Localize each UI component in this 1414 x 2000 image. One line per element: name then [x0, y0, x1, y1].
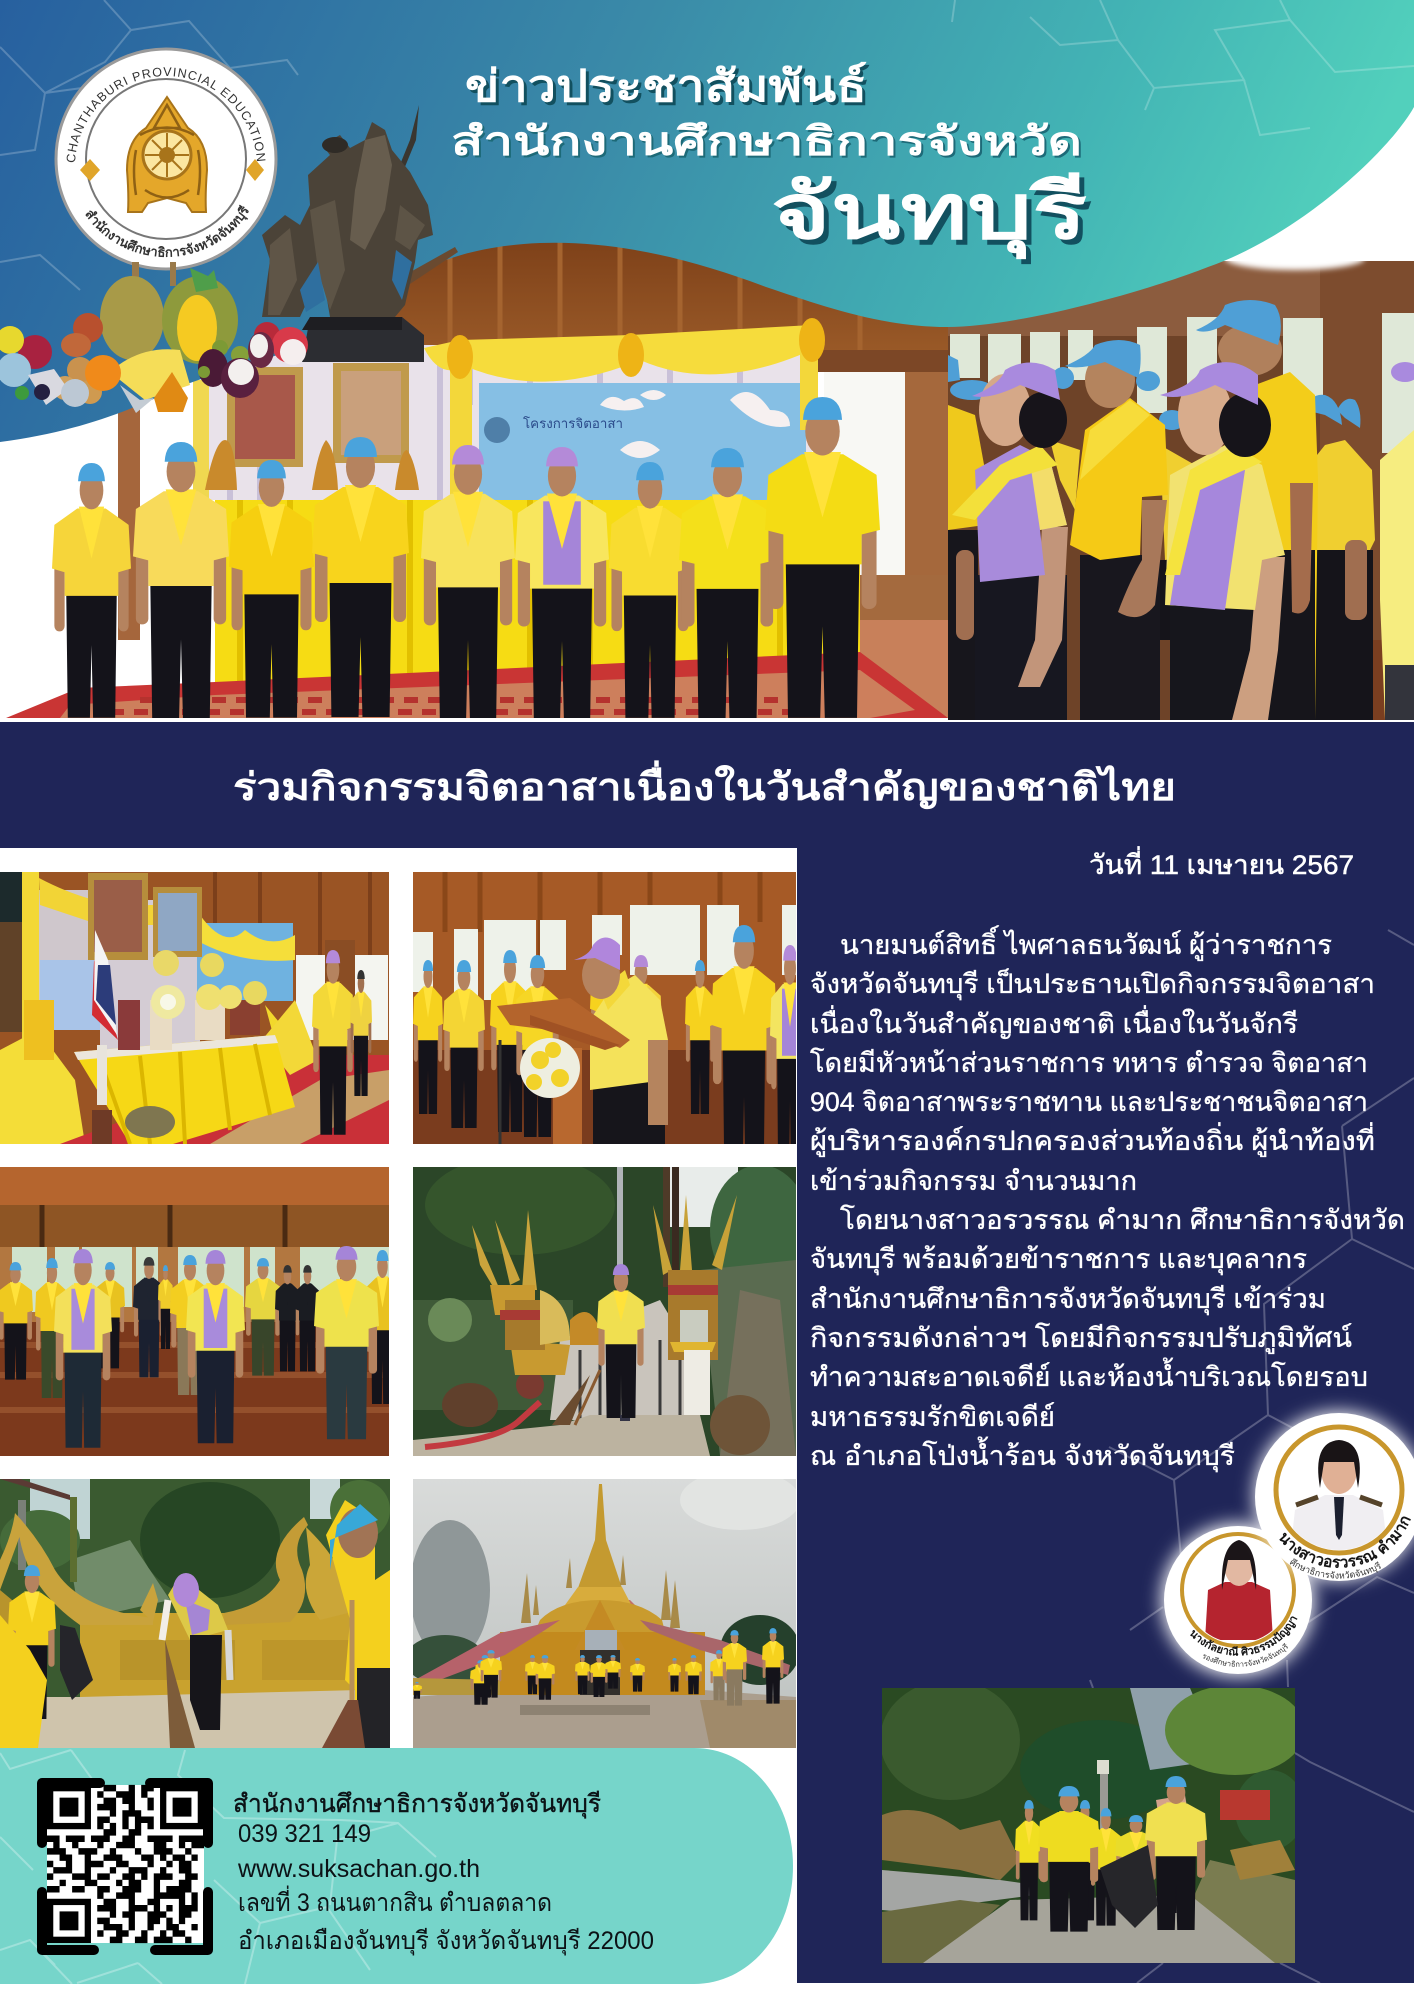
- article text: เนื่องในวันสำคัญของชาติ เนื่องในวันจักรี: [810, 1005, 1298, 1039]
- article text: มหาธรรมรักขิตเจดีย์: [810, 1401, 1055, 1432]
- background volunteers, centre: [1050, 367, 1195, 640]
- logo: provincial education office seal: สำนักงานศึกษาธิการจังหวัดจันทบุรี: [86, 204, 249, 258]
- portrait: deputy education officer: นางกัลยาณี ศิวธรรมปัญญา: [1190, 1616, 1298, 1656]
- QR code: [42, 1783, 208, 1950]
- portrait: deputy education officer: รองศึกษาธิการจังหวัดจันทบุรี: [1203, 1642, 1288, 1667]
- person at right edge: [1380, 430, 1414, 720]
- contact details: สำนักงานศึกษาธิการจังหวัดจันทบุรี: [233, 1790, 601, 1819]
- photo: shrine with royal portraits: [0, 872, 389, 1144]
- article text: โดยมีหัวหน้าส่วนราชการ ทหาร ตำรวจ จิตอาสา: [810, 1048, 1368, 1078]
- panel: contact footer: [0, 1748, 793, 1984]
- photo: sweeping at naga stairway: [413, 1155, 810, 1456]
- icon: gold emblem: [127, 97, 207, 212]
- article text: นายมนต์สิทธิ์ ไพศาลธนวัฒน์ ผู้ว่าราชการ: [840, 925, 1332, 961]
- article text: โดยนางสาวอรวรรณ คำมาก ศึกษาธิการจังหวัด: [840, 1205, 1405, 1235]
- statue base: [302, 317, 424, 362]
- article text: เข้าร่วมกิจกรรม จำนวนมาก: [810, 1166, 1137, 1196]
- contact details: www.suksachan.go.th: [237, 1855, 480, 1883]
- illustration: durian, fruit and gemstones: [0, 262, 308, 413]
- contact details: 039 321 149: [238, 1820, 371, 1848]
- contact details: [233, 1790, 654, 1956]
- article text: ผู้บริหารองค์กรปกครองส่วนท้องถิ่น ผู้นำท้องที่: [810, 1122, 1375, 1157]
- date: วันที่ 11 เมษายน 2567: [1089, 846, 1354, 880]
- photo: volunteers standing in line: [948, 261, 1414, 720]
- photo: group portrait at the stage: โครงการจิตอาสา: [523, 416, 623, 431]
- contact details: เลขที่ 3 ถนนตากสิน ตำบลตลาด: [238, 1885, 552, 1917]
- background volunteers, right: [1315, 394, 1375, 720]
- photo: volunteers lined up in the hall: [0, 1167, 400, 1456]
- article text: จันทบุรี พร้อมด้วยข้าราชการ และบุคลากร: [810, 1244, 1307, 1276]
- title: three header lines: ข่าวประชาสัมพันธ์: [468, 64, 870, 114]
- panel: news article: [797, 846, 1414, 1983]
- photo: volunteers carrying trash bag on path: [880, 1680, 1305, 1963]
- photo: sweeping by the golden wall: [0, 1479, 390, 1748]
- portrait: deputy education officer: [1147, 1509, 1329, 1688]
- photo: golden pagoda: [405, 1470, 800, 1748]
- photo: governor at the podium: [413, 872, 796, 1144]
- title: three header lines: ข่าวประชาสัมพันธ์: [465, 61, 867, 111]
- woman front: [1170, 606, 1245, 720]
- article text: ณ อำเภอโป่งน้ำร้อน จังหวัดจันทบุรี: [810, 1436, 1235, 1473]
- title: three header lines: จันทบุรี: [771, 171, 1087, 260]
- photo: group portrait at the stage: [0, 240, 948, 719]
- white glow above right photo: [1225, 246, 1365, 270]
- article text: 904 จิตอาสาพระราชทาน และประชาชนจิตอาสา: [810, 1087, 1368, 1117]
- article text: จังหวัดจันทบุรี เป็นประธานเปิดกิจกรรมจิตอาสา: [810, 966, 1375, 1001]
- woman: [975, 575, 1067, 720]
- title: three header lines: สำนักงานศึกษาธิการจังหวัด: [451, 119, 1082, 164]
- background volunteers, left: [948, 355, 988, 720]
- article text: กิจกรรมดังกล่าวฯ โดยมีกิจกรรมปรับภูมิทัศน์: [810, 1322, 1352, 1354]
- portrait: provincial education officer: ศึกษาธิการจังหวัดจันทบุรี: [1290, 1558, 1381, 1579]
- article text: สำนักงานศึกษาธิการจังหวัดจันทบุรี เข้าร่วม: [810, 1284, 1326, 1316]
- statue: King Taksin on horseback: [262, 105, 458, 317]
- portrait: provincial education officer: [1240, 1397, 1414, 1595]
- header wave with gradient: [0, 0, 1414, 442]
- contact details: อำเภอเมืองจันทบุรี จังหวัดจันทบุรี 22000: [238, 1927, 654, 1956]
- man: [1080, 555, 1160, 720]
- portrait: provincial education officer: นางสาวอรวรรณ คำมาก: [1279, 1516, 1411, 1568]
- article text: [810, 925, 1405, 1473]
- title: three header lines: จันทบุรี: [776, 176, 1092, 265]
- article text: ทำความสะอาดเจดีย์ และห้องน้ำบริเวณโดยรอบ: [810, 1357, 1368, 1392]
- heading band: ร่วมกิจกรรมจิตอาสาเนื่องในวันสำคัญของชาติไทย: [233, 760, 1176, 809]
- title: three header lines: [451, 61, 1092, 265]
- man in back: [1252, 372, 1318, 718]
- logo: provincial education office seal: [54, 48, 278, 270]
- heading band: [0, 722, 1414, 848]
- title: three header lines: สำนักงานศึกษาธิการจังหวัด: [453, 121, 1084, 166]
